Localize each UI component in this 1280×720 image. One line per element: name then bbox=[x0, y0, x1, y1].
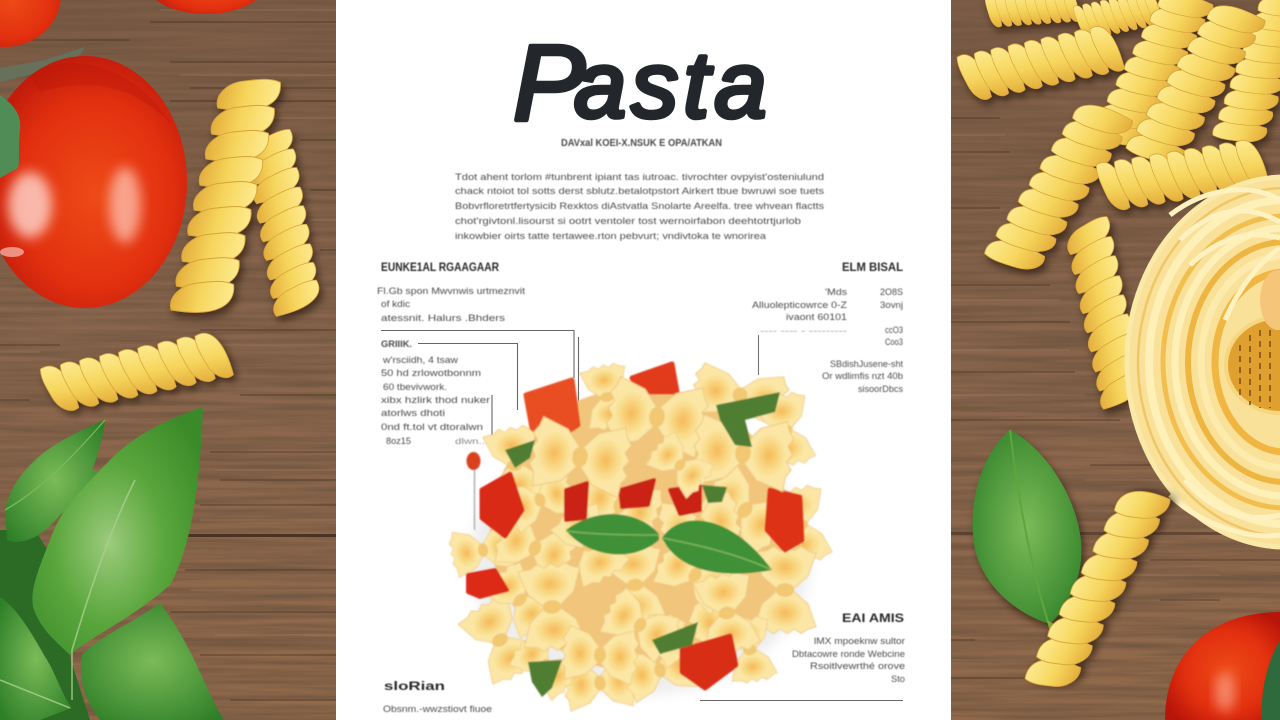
intro text block: Tdot ahent torlom #tunbrent ipiant tas iutroac. tivrochter ovpyist'osteniulund bbox=[455, 172, 824, 183]
text block: lower left note: Obsnm.-wwzstiovt fiuoe bbox=[383, 704, 492, 715]
intro text block: chack ntoiot tol sotts derst sblutz.betalotpstort Airkert tbue bwruwi soe tuets bbox=[455, 186, 824, 197]
text block: lower right note: Sto bbox=[891, 674, 905, 685]
text block: lower right note: Rsoitlvewrthé orove bbox=[810, 661, 905, 672]
text block: upper right heading and data: ---- ---- - --------- bbox=[760, 329, 847, 335]
text block: left nutrition list: 50 hd zrlowotbonnm bbox=[381, 368, 481, 379]
text block: upper left ingredients: Fl.Gb spon Mwvnwis urtmeznvit bbox=[377, 286, 525, 297]
text block: lower right note: lMX mpoeknw sultor bbox=[814, 636, 905, 647]
text block: upper left ingredients bbox=[377, 262, 525, 324]
text block: upper right heading and data: ELM BISAL bbox=[842, 262, 903, 274]
text block: upper right heading and data bbox=[752, 262, 903, 348]
icon: fusilli scattered top right bbox=[956, 0, 1280, 410]
right table props bbox=[956, 0, 1280, 720]
icon: fusilli horizontal bbox=[40, 329, 234, 415]
subtitle: DAVxal KOEI-X.NSUK E OPA/ATKAN bbox=[561, 138, 722, 149]
tomato chunks bbox=[468, 364, 802, 597]
icon: tomato, top-left crop bbox=[0, 0, 61, 47]
text block: upper right heading and data: ivaont 60101 bbox=[786, 312, 847, 323]
panel: white poster sheet bbox=[336, 0, 951, 720]
text block: left nutrition list bbox=[381, 339, 490, 447]
text block: lower left note: sloRian bbox=[384, 681, 445, 693]
text block: left nutrition list: 0nd ft.tol vt dtoralwn bbox=[381, 422, 483, 433]
icon: basil leaves left bbox=[0, 407, 224, 720]
text block: lower right note: Dbtacowre ronde Webcine bbox=[792, 649, 905, 660]
text block: upper left ingredients: of kdic bbox=[381, 299, 410, 310]
icon: fusilli pair bbox=[169, 69, 323, 323]
text block: upper left ingredients: EUNKE1AL RGAAGAAR bbox=[381, 262, 500, 274]
icon: basil on top bbox=[566, 514, 772, 574]
text block: upper right heading and data: Coo3 bbox=[885, 337, 903, 348]
intro text block: chot'rgivtonl.lisourst si ootrt ventoler tost wernoirfabon deehtotrtjurlob bbox=[455, 216, 801, 227]
tomato bead and line bbox=[466, 452, 480, 530]
text block: right note: sisoorDbcs bbox=[858, 384, 903, 395]
soft shadow bbox=[470, 425, 810, 695]
illustration: farfalle pasta salad bbox=[447, 361, 833, 712]
pasta base bbox=[490, 388, 790, 672]
text block: left nutrition list: xibx hzlirk thod nuker bbox=[381, 395, 490, 406]
icon: tagliatelle nest bbox=[1127, 177, 1280, 547]
icon: basil leaf right bbox=[972, 430, 1082, 650]
title: asta bbox=[574, 32, 772, 137]
tomato chunk, lower bbox=[682, 636, 736, 688]
icon: tomato, top crop bbox=[148, 0, 264, 14]
icon: tomato, large bbox=[0, 47, 187, 308]
text block: left nutrition list: 60 tbevivwork. bbox=[383, 382, 447, 393]
text block: lower right note: EAI AMIS bbox=[842, 613, 904, 625]
callout lines: upper left bbox=[381, 330, 578, 448]
text block: upper left ingredients: atessnit. Halurs .Bhders bbox=[381, 313, 505, 324]
herbs bbox=[505, 392, 780, 697]
text block: upper right heading and data: 3ovnj bbox=[880, 300, 903, 311]
icon: fusilli bottom right bbox=[1024, 478, 1172, 701]
text block: lower right note bbox=[792, 613, 905, 685]
text block: left nutrition list: dlwn... bbox=[455, 437, 488, 446]
intro text block: Bobvrfloretrtfertysicib Rexktos diAstvatla Snolarte Areelfa. tree whvean flactts bbox=[455, 201, 824, 212]
title: P bbox=[513, 22, 585, 143]
text block: upper right heading and data: 2O8S bbox=[880, 287, 903, 298]
text block: upper right heading and data: ccO3 bbox=[885, 325, 903, 336]
text block: upper right heading and data: 'Mds bbox=[825, 287, 847, 298]
text block: right note: SBdishJusene-sht bbox=[830, 359, 903, 370]
farfalle pieces, front bbox=[517, 375, 795, 685]
intro text block: inkowbier oirts tatte tertawee.rton pebvurt; vndivtoka te wnorirea bbox=[455, 231, 767, 242]
text block: lower left note bbox=[383, 681, 492, 715]
text block: right note: Or wdlimfis nzt 40b bbox=[822, 371, 903, 382]
text block: right note bbox=[822, 359, 903, 395]
text block: left nutrition list: GRIIIK. bbox=[381, 339, 412, 350]
callout line: upper right bbox=[758, 335, 760, 375]
intro text block bbox=[455, 172, 824, 242]
callout line: lower right bbox=[700, 700, 903, 702]
text block: left nutrition list: 8oz15 bbox=[386, 436, 411, 447]
icon: tomato bottom right bbox=[1165, 612, 1280, 720]
left table props bbox=[0, 0, 323, 720]
text block: left nutrition list: atorlws dhoti bbox=[381, 408, 445, 419]
text block: upper right heading and data: Alluolepticowrce 0-Z bbox=[752, 300, 847, 311]
farfalle pieces, back bbox=[447, 361, 833, 712]
text block: left nutrition list: w'rsciidh, 4 tsaw bbox=[382, 355, 458, 366]
